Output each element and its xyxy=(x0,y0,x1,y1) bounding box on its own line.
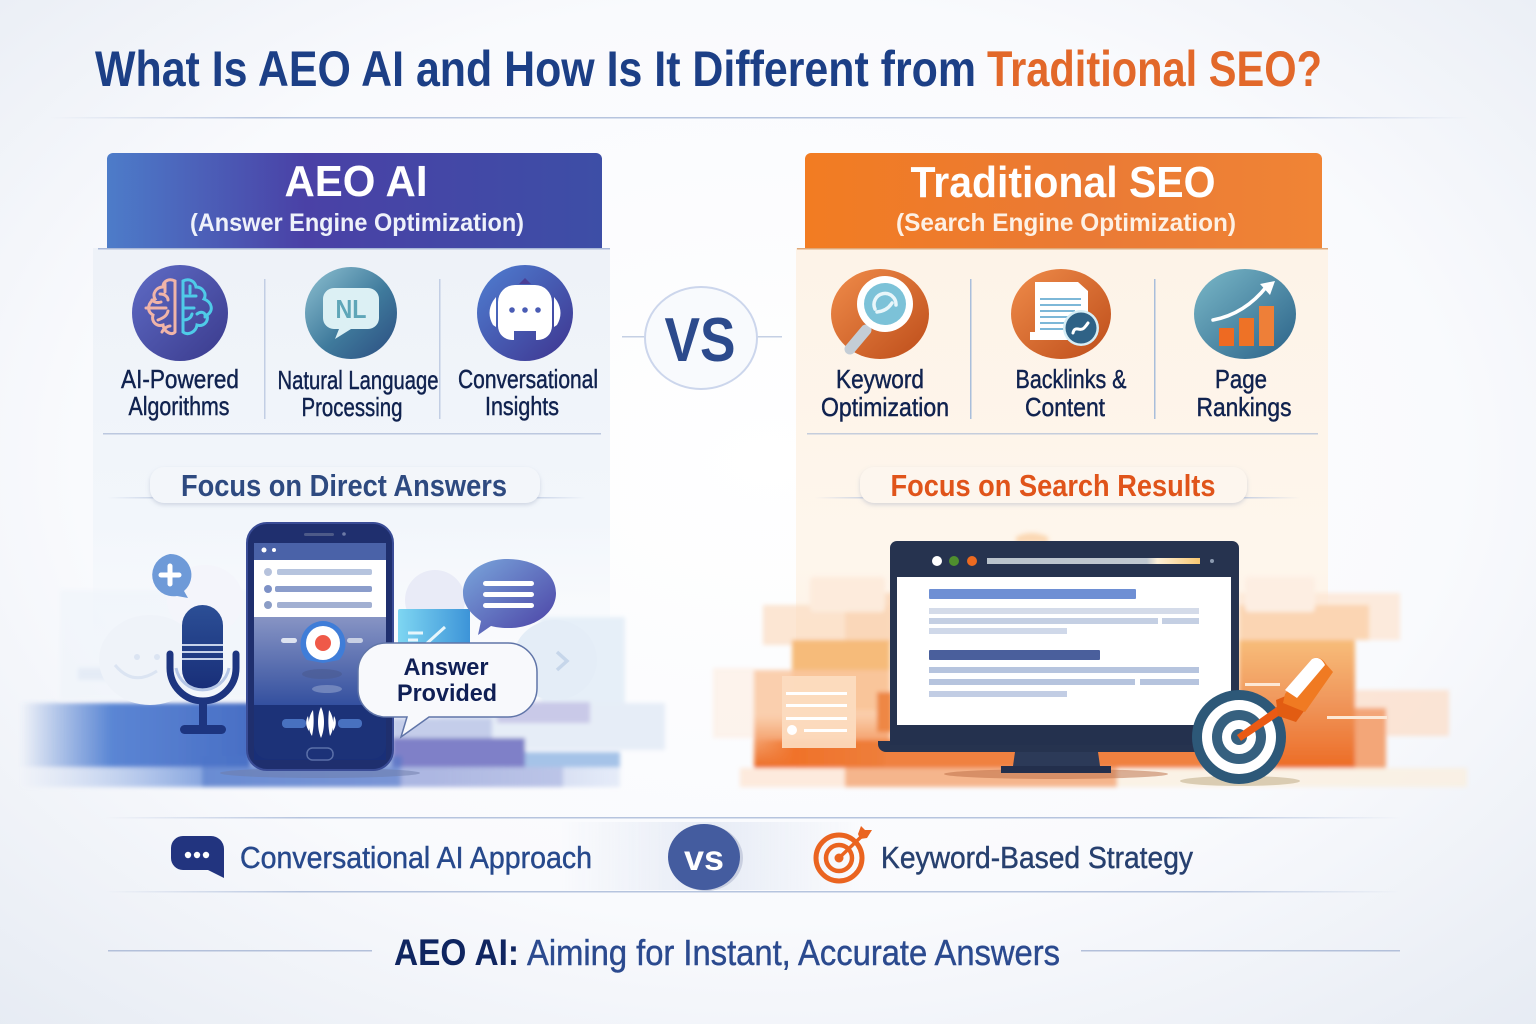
label: Page Rankings: Rankings xyxy=(1196,392,1292,422)
header: Traditional SEO: (Search Engine Optimization) xyxy=(896,209,1236,237)
icon: chat bubble xyxy=(171,836,224,878)
conclusion line xyxy=(108,932,1400,973)
label: Keyword Optimization: Optimization xyxy=(821,392,949,422)
small document xyxy=(782,676,856,748)
header: Traditional SEO: Traditional SEO xyxy=(910,158,1216,207)
header: AEO AI: (Answer Engine Optimization) xyxy=(190,209,524,237)
text: Keyword-Based Strategy: Keyword-Based Strategy xyxy=(881,840,1193,875)
answer bubble: Answer xyxy=(404,654,488,681)
label: AI-Powered Algorithms: AI-Powered xyxy=(121,364,239,394)
illustration: phone answer scene xyxy=(20,523,665,787)
header: AEO AI xyxy=(107,153,602,248)
label: Page Rankings xyxy=(1196,364,1292,422)
text: Conversational AI Approach: Conversational AI Approach xyxy=(240,840,592,875)
label: Natural Language Processing xyxy=(278,365,438,422)
answer bubble: Provided xyxy=(397,680,497,707)
title: What Is AEO AI and How Is It Different from xyxy=(95,41,976,97)
comparison row xyxy=(105,817,1400,892)
pale speech bubbles xyxy=(99,565,597,705)
icon: magnifier xyxy=(831,269,929,359)
phone xyxy=(220,523,420,778)
VS badge: VS xyxy=(664,306,736,375)
monitor xyxy=(878,541,1239,779)
label: Backlinks & Content xyxy=(1016,364,1126,422)
header: AEO AI: AEO AI xyxy=(284,157,428,206)
conclusion line: AEO AI: xyxy=(394,932,519,973)
background blocks xyxy=(20,590,665,787)
label: Conversational Insights xyxy=(458,364,598,421)
icon: natural language bubble: NL xyxy=(336,294,367,324)
icon: brain xyxy=(132,265,228,361)
microphone xyxy=(170,605,236,734)
conclusion line: Aiming for Instant, Accurate Answers xyxy=(527,932,1060,973)
icon: target xyxy=(816,826,872,881)
icon: document with link xyxy=(1011,269,1111,359)
VS badge xyxy=(622,287,782,389)
label: Backlinks & Content: Backlinks & xyxy=(1016,364,1126,394)
label: Natural Language Processing: Natural Language xyxy=(278,365,438,395)
chat bubble xyxy=(463,559,556,635)
label: AI-Powered Algorithms xyxy=(121,364,239,421)
label: Conversational Insights: Insights xyxy=(485,391,559,421)
small light lines xyxy=(1245,683,1387,719)
label: Natural Language Processing: Processing xyxy=(302,392,402,422)
heading: Focus on Search Results: Focus on Search Results xyxy=(890,468,1216,503)
label: AI-Powered Algorithms: Algorithms xyxy=(128,391,230,421)
target with arrow xyxy=(1180,658,1333,786)
illustration: search results scene xyxy=(713,533,1467,787)
icon: natural language bubble xyxy=(305,267,397,359)
icon: chat robot xyxy=(477,265,573,361)
label: Keyword Optimization: Keyword xyxy=(836,364,924,394)
background blocks xyxy=(713,533,1467,787)
panel: Traditional SEO xyxy=(796,153,1328,768)
plus bubble xyxy=(152,554,191,598)
title: Traditional SEO? xyxy=(987,41,1322,97)
label: Page Rankings: Page xyxy=(1215,364,1267,394)
badge: vs: vs xyxy=(684,839,724,878)
badge: vs xyxy=(668,824,743,891)
label: Backlinks & Content: Content xyxy=(1025,392,1106,422)
blue square xyxy=(398,609,470,649)
header: Traditional SEO xyxy=(805,153,1322,248)
label: Keyword Optimization xyxy=(821,364,949,422)
answer bubble xyxy=(358,643,537,737)
panel: AEO AI xyxy=(93,153,610,668)
heading: Focus on Direct Answers: Focus on Direct Answers xyxy=(181,468,507,503)
label: Conversational Insights: Conversational xyxy=(458,364,598,394)
icon: rising bar chart xyxy=(1194,269,1296,359)
